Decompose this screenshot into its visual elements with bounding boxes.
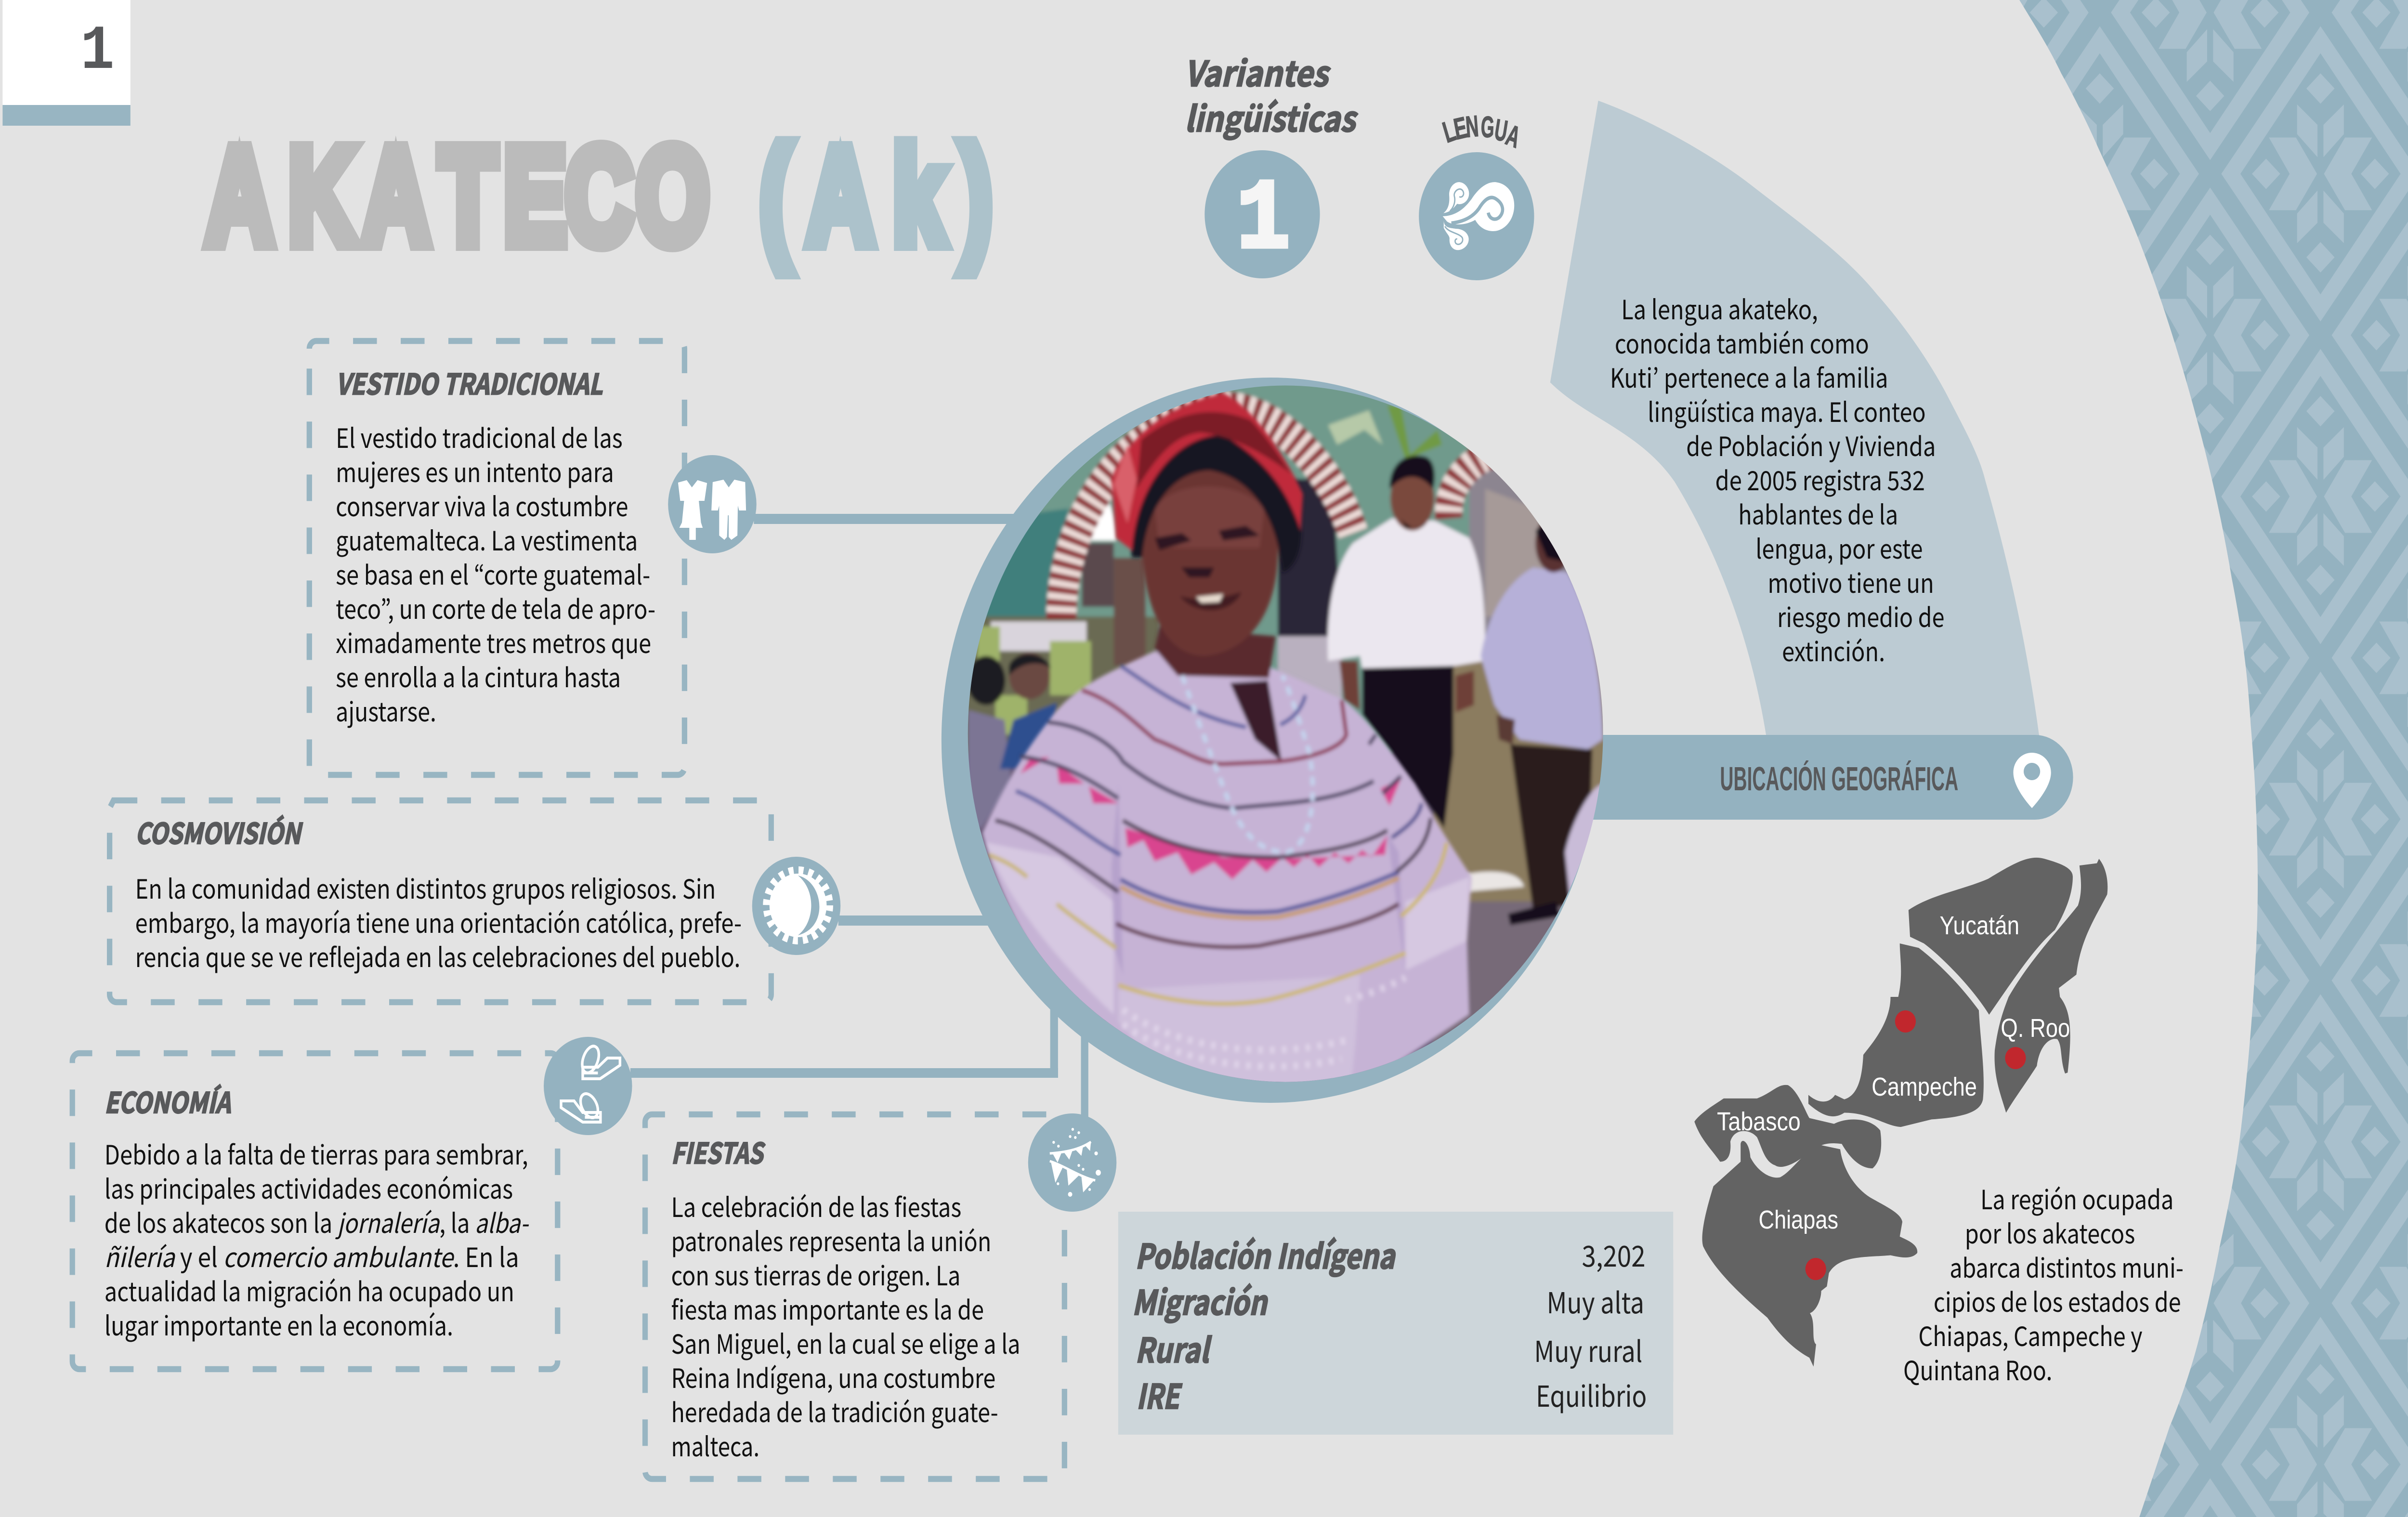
panel: cosmovisión: embargo, la mayoría tiene una orientación católica, prefe- [135,902,742,941]
panel: fiestas: patronales representa la unión [671,1221,991,1259]
panel: vestido tradicional: se basa en el “corte guatemal- [336,554,650,593]
variantes lingüísticas heading: lingüísticas [1185,92,1358,142]
panel: economía: las principales actividades económicas [105,1168,513,1207]
woven pattern border [2019,0,2408,1517]
lengua curved label: G [1480,110,1495,144]
panel: cosmovisión: COSMOVISIÓN [135,811,303,852]
panel: vestido tradicional: ximadamente tres metros que [336,623,651,661]
panel: vestido tradicional: mujeres es un intento para [336,452,614,490]
panel: lengua arc: de 2005 registra 532 [1715,460,1925,498]
panel: vestido tradicional: se enrolla a la cintura hasta [336,657,621,695]
lengua curved label: U [1492,112,1510,148]
panel: vestido tradicional: ajustarse. [336,691,436,730]
panel: vestido tradicional [309,341,684,775]
panel: cosmovisión: rencia que se ve reflejada en las celebraciones del pueblo. [135,937,740,975]
lengua curved label: A [1502,118,1524,154]
lengua curved label: L [1439,113,1459,149]
text: region description: abarca distintos muni- [1950,1247,2184,1286]
photo: woman in traditional dress [959,376,1615,1098]
panel: lengua arc: lingüística maya. El conteo [1648,392,1926,430]
title [206,119,992,273]
panel: lengua arc: Kuti’ pertenece a la familia [1610,357,1888,396]
panel: statistics table: 3,202 [1582,1234,1646,1275]
panel: economía: Debido a la falta de tierras para sembrar, [105,1134,528,1173]
panel: fiestas: FIESTAS [671,1131,765,1172]
panel: fiestas: con sus tierras de origen. La [671,1255,960,1294]
variantes count badge [1204,150,1320,278]
panel: fiestas: San Miguel, en la cual se elige a la [671,1323,1021,1362]
panel: statistics table: Muy rural [1534,1329,1642,1371]
panel: lengua arc: La lengua akateko, [1621,289,1818,327]
text: region description: Quintana Roo. [1903,1350,2052,1388]
panel: economía: ñilería y el comercio ambulante. En la [105,1237,519,1275]
lengua curved label [1439,109,1524,154]
panel: vestido tradicional: El vestido tradicional de las [336,418,623,456]
title: (Ak) [760,119,992,273]
panel: lengua arc: conocida también como [1615,323,1869,362]
panel: economía [72,1053,558,1369]
lengua curved label: E [1451,110,1470,146]
icon: lengua swirl [1419,152,1534,280]
panel: fiestas: heredada de la tradición guate- [671,1392,998,1430]
map of southeastern Mexico: Campeche [1871,1072,1977,1101]
panel: statistics table: Migración [1132,1276,1268,1325]
photo ring [942,378,1600,1103]
icon: traditional clothing [668,455,757,553]
text: region description: cipios de los estados de [1934,1282,2181,1320]
panel: economía: lugar importante en la economía. [105,1305,453,1344]
map of southeastern Mexico [1694,858,2107,1367]
lengua curved label: N [1465,109,1480,144]
panel: lengua arc: riesgo medio de [1777,597,1944,635]
map of southeastern Mexico: Yucatán [1940,911,2019,940]
icon: party banners [1028,1113,1116,1212]
panel: economía: actualidad la migración ha ocupado un [105,1271,514,1309]
text: region description: Chiapas, Campeche y [1918,1316,2143,1354]
icon: hands exchanging coins [544,1037,632,1135]
page number tab [2,0,131,126]
icon: sun and moon [752,857,840,955]
connector lines [630,514,1088,1117]
ubicación geográfica bar [1560,735,2073,820]
panel: vestido tradicional: conservar viva la costumbre [336,486,628,524]
map of southeastern Mexico: Tabasco [1717,1107,1801,1136]
map of southeastern Mexico: Chiapas [1758,1205,1838,1234]
panel: statistics table: Muy alta [1547,1281,1644,1322]
panel: lengua arc: de Población y Vivienda [1686,426,1936,464]
panel: lengua arc: lengua, por este [1755,528,1923,567]
panel: fiestas: malteca. [671,1426,759,1465]
panel: vestido tradicional: guatemalteca. La vestimenta [336,520,638,559]
panel: statistics table [1118,1212,1673,1435]
variantes lingüísticas heading [1185,46,1358,142]
panel: statistics table: Equilibrio [1536,1374,1647,1415]
panel: statistics table: Población Indígena [1135,1230,1396,1279]
panel: fiestas: Reina Indígena, una costumbre [671,1358,995,1396]
panel: fiestas [645,1114,1064,1479]
text: region description: por los akatecos [1965,1213,2135,1252]
panel: lengua arc: extinción. [1782,631,1885,669]
panel: economía: ECONOMÍA [105,1081,231,1122]
text: region description [1903,1179,2184,1388]
text: region description: La región ocupada [1980,1179,2173,1217]
panel: vestido tradicional: VESTIDO TRADICIONAL [336,362,603,403]
panel: statistics table: Rural [1135,1324,1212,1373]
panel: economía: de los akatecos son la jornalería, la alba- [105,1203,529,1241]
panel: vestido tradicional: teco”, un corte de tela de apro- [336,588,655,627]
panel: statistics table: IRE [1137,1370,1182,1419]
ubicación geográfica bar: UBICACIÓN GEOGRÁFICA [1720,760,1958,798]
map of southeastern Mexico: Q. Roo [2001,1014,2070,1043]
panel: cosmovisión: En la comunidad existen distintos grupos religiosos. Sin [135,868,716,907]
panel: fiestas: La celebración de las fiestas [671,1187,961,1225]
variantes count badge: 1 [1237,165,1290,276]
panel: fiestas: fiesta mas importante es la de [671,1289,984,1328]
variantes lingüísticas heading: Variantes [1185,46,1331,96]
title: AKATECO [206,119,709,273]
panel: lengua arc: hablantes de la [1738,494,1898,533]
panel: cosmovisión [110,800,771,1002]
panel: lengua arc: motivo tiene un [1767,562,1934,601]
page number tab: 1 [80,16,114,87]
panel: lengua arc [1550,101,2039,737]
